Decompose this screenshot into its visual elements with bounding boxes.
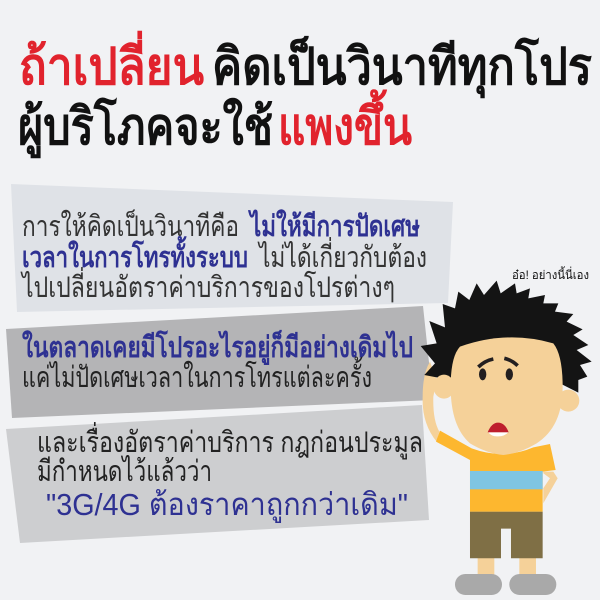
eyebrows — [478, 358, 518, 367]
shirt stripe — [470, 471, 543, 489]
speech text: อ๋อ! อย่างนี้นี่เอง — [512, 266, 589, 282]
left ear — [433, 375, 455, 399]
face — [451, 337, 563, 455]
shorts — [470, 512, 543, 558]
service rates text: มีกำหนดไว้แล้วว่า — [37, 454, 212, 488]
eyes — [479, 368, 513, 380]
hair — [421, 281, 592, 393]
panel: service rates — [6, 405, 429, 543]
market history text — [22, 329, 413, 394]
definition text: เวลาในการโทรทั้งระบบ — [22, 235, 248, 274]
service rates text: "3G/4G ต้องราคาถูกกว่าเดิม" — [46, 487, 408, 523]
service rates text: และเรื่องอัตราค่าบริการ กฎก่อนประมูล — [37, 422, 423, 460]
shirt — [436, 431, 556, 512]
market history text: ในตลาดเคยมีโปรอะไรอยู่ก็มีอย่างเดิมไป — [22, 329, 413, 365]
service rates text — [37, 422, 423, 523]
definition text: ไม่ให้มีการปัดเศษ — [248, 209, 420, 243]
title: แพงขึ้น — [278, 89, 412, 155]
market history text: แค่ไม่ปัดเศษเวลาในการโทรแต่ละครั้ง — [22, 356, 372, 394]
definition text: ไม่ได้เกี่ยวกับต้อง — [257, 237, 427, 274]
shoes — [455, 574, 556, 595]
panel: market history — [6, 306, 433, 418]
legs — [478, 557, 536, 577]
title: ถ้าเปลี่ยน — [19, 31, 204, 95]
raised arm — [423, 362, 439, 442]
title — [18, 31, 593, 159]
definition text: การให้คิดเป็นวินาทีคือ — [22, 208, 239, 243]
panel: definition — [11, 184, 453, 312]
character: confused boy — [421, 281, 592, 595]
definition text: ไปเปลี่ยนอัตราค่าบริการของโปรต่างๆ — [20, 267, 395, 304]
definition text — [20, 208, 427, 304]
title: ผู้บริโภคจะใช้ — [18, 96, 273, 159]
right ear — [557, 390, 579, 412]
mouth — [488, 423, 509, 436]
right arm — [543, 472, 558, 503]
